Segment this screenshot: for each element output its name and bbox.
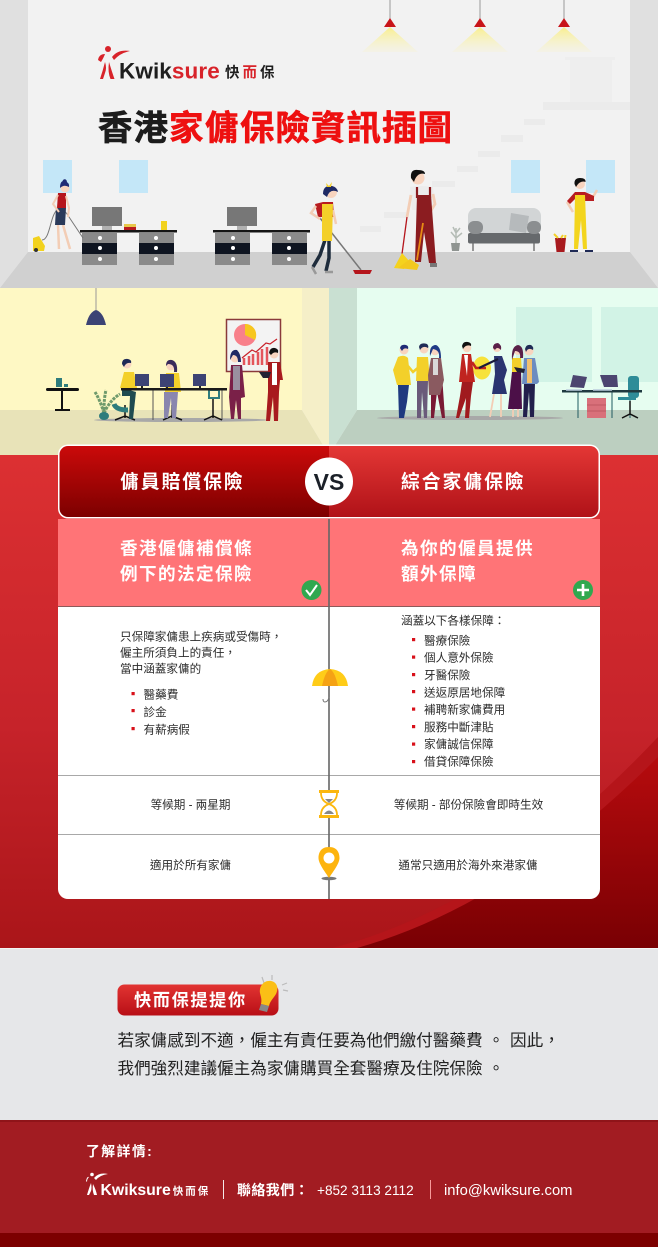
logo: Kwiksure: 快而保	[225, 64, 278, 82]
comparison table: 通常只適用於海外來港家傭	[398, 858, 538, 872]
reminder text	[118, 1030, 560, 1078]
right coverage text: 牙醫保險	[424, 668, 471, 682]
right coverage text: 醫療保險	[424, 634, 471, 648]
sofa	[468, 208, 541, 251]
VS badge: VS	[314, 469, 344, 495]
reminder text: 若家傭感到不適，僱主有責任要為他們繳付醫藥費	[118, 1030, 483, 1050]
side table	[46, 378, 79, 410]
sub-header left	[58, 519, 329, 606]
right coverage text	[401, 614, 506, 768]
panel: red comparison background	[0, 455, 658, 948]
plant	[451, 227, 462, 251]
row: eligibility: 適用於所有家傭	[150, 858, 231, 872]
meeting desk and chairs	[114, 390, 222, 420]
icon: location pin	[318, 847, 340, 880]
person: seated man	[120, 359, 137, 419]
windows	[43, 160, 615, 193]
desk 2	[213, 207, 310, 265]
background stair bricks	[360, 57, 630, 232]
person: woman presenting	[229, 350, 245, 419]
comparison table	[58, 519, 600, 899]
comparison header banner	[58, 444, 600, 518]
footer logo: 快而保	[173, 1184, 210, 1198]
icon: umbrella	[312, 669, 348, 702]
icon: green plus	[573, 580, 593, 600]
person: woman vacuuming	[33, 179, 83, 252]
desk 1	[80, 207, 177, 265]
left coverage text	[120, 630, 282, 736]
hanging lamp	[86, 288, 106, 325]
sub-header left: 香港僱傭補償條	[120, 538, 253, 558]
footer heading: 了解詳情:	[86, 1143, 153, 1159]
panel: domestic helpers group scene	[329, 288, 658, 455]
logo mark	[98, 46, 130, 79]
right coverage text: 補聘新家傭費用	[424, 702, 505, 716]
right plan title: 綜合家傭保險	[401, 470, 526, 492]
email: info@kwiksure.com	[444, 1183, 572, 1199]
VS badge	[305, 458, 353, 506]
footer	[0, 1120, 658, 1247]
sub-header right: 額外保障	[401, 564, 477, 584]
person: man sweeping	[394, 170, 437, 270]
reminder text: 。	[488, 1031, 504, 1050]
right coverage text: 涵蓋以下各樣保障：	[401, 614, 505, 628]
left coverage text: 有薪病假	[144, 722, 190, 736]
footer: +852 3113 2112	[317, 1183, 414, 1198]
right coverage text: 送返原居地保障	[424, 686, 506, 700]
office desk and chair	[562, 375, 642, 418]
reminder badge: 快而保提提你	[134, 990, 247, 1010]
person: seated woman	[164, 360, 181, 418]
reminder text: 因此，	[510, 1031, 560, 1050]
icon: hourglass	[319, 790, 339, 818]
potted plant	[95, 390, 120, 420]
top scene: office being cleaned	[0, 0, 658, 288]
logo: Kwiksure	[98, 46, 278, 84]
floor shadow	[94, 418, 268, 422]
reminder text: 。	[488, 1059, 504, 1078]
person: man in yellow overalls	[567, 178, 597, 251]
person: woman mopping	[311, 182, 372, 274]
phone contact: 聯絡我們：	[237, 1182, 309, 1198]
desk top with monitors	[121, 374, 227, 390]
reminder text: 我們強烈建議僱主為家傭購買全套醫療及住院保險	[118, 1059, 483, 1078]
title: 香港家傭保險資訊插圖	[98, 110, 453, 148]
left coverage text: 僱主所須負上的責任，	[120, 646, 236, 660]
reminder badge	[118, 984, 278, 1016]
floor shadow	[377, 416, 563, 420]
panel: employer office scene	[0, 288, 329, 455]
right coverage text: 借貸保障保險	[424, 754, 494, 768]
left coverage text: 診金	[144, 705, 167, 719]
row: waiting period: 等候期 - 兩星期	[151, 798, 230, 812]
logo: Kwiksure: Kwiksure	[119, 58, 220, 84]
bucket	[554, 234, 566, 252]
left coverage text: 只保障家傭患上疾病或受傷時，	[120, 630, 282, 644]
ceiling lamps	[362, 0, 592, 52]
board with chart	[226, 320, 280, 372]
icon: green check	[302, 580, 322, 600]
footer logo: Kwiksure	[100, 1182, 171, 1199]
panel: reminder	[0, 948, 658, 1120]
icon: light bulb	[259, 975, 288, 1012]
group of business people	[393, 342, 539, 418]
white table body	[58, 606, 600, 899]
footer logo	[86, 1173, 210, 1199]
person: man presenting	[259, 348, 283, 421]
right coverage text: 個人意外保險	[424, 650, 494, 664]
glowing light behind handshake	[473, 356, 491, 380]
sub-header left: 例下的法定保險	[120, 564, 253, 584]
right coverage text: 服務中斷津貼	[424, 720, 494, 734]
left coverage text: 當中涵蓋家傭的	[120, 662, 201, 676]
sub-header right: 為你的僱員提供	[401, 538, 534, 558]
left plan title: 傭員賠償保險	[120, 470, 245, 492]
sub-header right	[329, 519, 600, 606]
comparison table: 等候期 - 部份保險會即時生效	[394, 798, 544, 812]
right coverage text: 家傭誠信保障	[424, 737, 494, 751]
left coverage text: 醫藥費	[144, 688, 178, 702]
